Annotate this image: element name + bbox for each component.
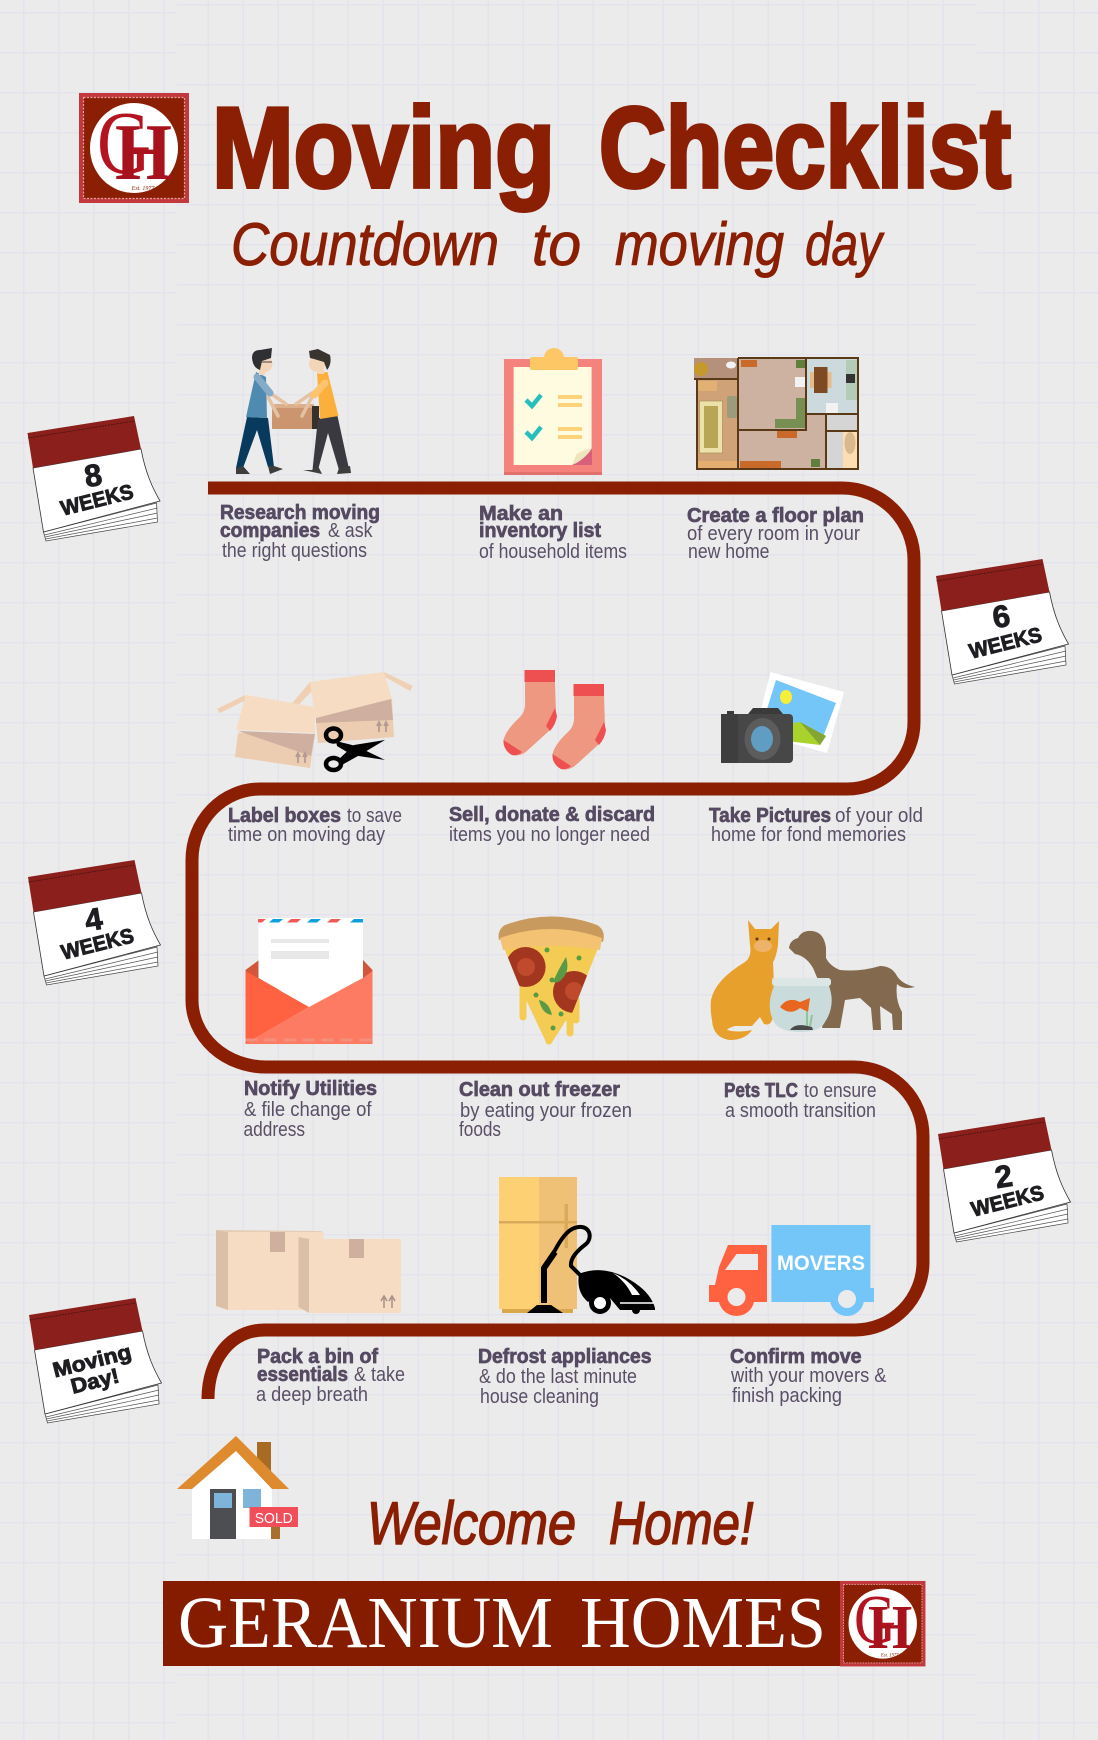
text: pack a bin of essentials: a deep breath	[256, 1384, 368, 1406]
calendar: 4 weeks: WEEKS	[59, 924, 136, 965]
text: take pictures: Take Pictures	[709, 805, 831, 827]
text: take pictures: of your old	[835, 805, 923, 827]
text: create a floor plan	[687, 505, 864, 563]
icon: two movers carrying a box	[236, 348, 351, 474]
logo: banner crest: G	[854, 1582, 896, 1659]
text: research moving companies: companies	[220, 520, 320, 542]
logo: Geranium Homes crest: Est. 1977	[131, 186, 155, 192]
text: pets TLC	[724, 1080, 876, 1122]
text: pack a bin of essentials: & take	[354, 1364, 405, 1386]
text: create a floor plan: of every room in your	[687, 523, 860, 545]
title	[212, 85, 1011, 212]
text: notify utilities	[244, 1078, 377, 1141]
text: label boxes: to save	[347, 805, 402, 827]
text: confirm move: Confirm move	[730, 1346, 862, 1368]
text: clean out freezer: Clean out freezer	[459, 1079, 620, 1101]
icon: clipboard checklist	[504, 348, 602, 475]
text: sell donate discard	[449, 804, 655, 846]
banner: Geranium Homes: GERANIUM	[178, 1582, 553, 1663]
text: make an inventory list: inventory list	[479, 520, 601, 542]
calendar: 2 weeks: WEEKS	[969, 1181, 1046, 1222]
calendar: 4 weeks	[28, 860, 160, 985]
subtitle: Countdown	[231, 211, 499, 278]
logo: Geranium Homes crest: H	[115, 109, 172, 197]
text: label boxes: Label boxes	[228, 805, 341, 827]
text: make an inventory list	[479, 503, 627, 563]
text: clean out freezer: foods	[459, 1119, 501, 1141]
text: pack a bin of essentials: Pack a bin of	[257, 1346, 378, 1368]
calendar: 4 weeks: 4	[82, 901, 106, 938]
timeline path	[192, 488, 923, 1399]
text: create a floor plan: Create a floor plan	[687, 505, 864, 527]
calendar: 6 weeks: 6	[990, 598, 1013, 635]
icon: refrigerator and vacuum cleaner	[499, 1177, 655, 1314]
text: pack a bin of essentials	[256, 1346, 405, 1406]
calendar: 8 weeks: WEEKS	[58, 480, 136, 521]
logo: banner crest: H	[868, 1594, 912, 1662]
logo: Geranium Homes crest: G	[97, 94, 151, 193]
text: sell donate discard: items you no longer need	[449, 824, 650, 846]
calendar: moving day: Day!	[69, 1364, 122, 1399]
heading: welcome home: Welcome	[367, 1490, 576, 1557]
text: create a floor plan: new home	[688, 541, 770, 563]
logo: Geranium Homes crest	[79, 93, 189, 203]
subtitle	[231, 211, 885, 278]
text: confirm move: with your movers &	[730, 1365, 887, 1387]
calendar: moving day: Moving	[51, 1341, 134, 1382]
text: research moving companies: Research moving	[220, 502, 380, 524]
text: take pictures	[709, 805, 923, 846]
text: pack a bin of essentials: essentials	[257, 1364, 348, 1386]
icon: movers truck	[709, 1225, 874, 1316]
calendar: 2 weeks	[938, 1117, 1070, 1242]
text: clean out freezer: by eating your frozen	[460, 1100, 632, 1122]
icon: movers truck: MOVERS	[777, 1252, 865, 1275]
text: defrost appliances: house cleaning	[480, 1386, 599, 1408]
icon: envelope with letter	[246, 918, 372, 1044]
text: make an inventory list: Make an	[479, 503, 563, 525]
text: research moving companies	[220, 502, 380, 562]
text: notify utilities: address	[244, 1119, 305, 1141]
text: defrost appliances	[478, 1346, 652, 1408]
icon: cardboard boxes and scissors	[217, 672, 413, 770]
icon: stacked cardboard boxes	[216, 1230, 401, 1313]
title: Moving	[212, 85, 555, 212]
text: pets TLC: to ensure	[804, 1080, 876, 1102]
text: defrost appliances: & do the last minute	[479, 1366, 637, 1388]
calendar: 8 weeks: 8	[82, 457, 104, 494]
text: notify utilities: & file change of	[244, 1099, 372, 1121]
icon: floor plan	[694, 358, 858, 469]
text: research moving companies: the right questions	[222, 540, 367, 562]
text: clean out freezer	[459, 1079, 632, 1141]
icon: pizza slice	[499, 916, 604, 1044]
text: take pictures: home for fond memories	[711, 824, 906, 846]
text: pets TLC: a smooth transition	[725, 1100, 876, 1122]
text: defrost appliances: Defrost appliances	[478, 1346, 652, 1368]
banner: Geranium Homes	[163, 1581, 840, 1666]
text: label boxes	[228, 805, 402, 846]
calendar: moving day	[29, 1298, 162, 1423]
title: Checklist	[599, 85, 1011, 212]
icon: cat, dog and goldfish	[711, 920, 915, 1040]
text: make an inventory list: of household items	[479, 541, 627, 563]
icon: camera and photograph	[721, 672, 844, 763]
heading: welcome home	[367, 1490, 754, 1557]
text: confirm move: finish packing	[732, 1385, 842, 1407]
icon: sold house	[177, 1436, 298, 1539]
text: sell donate discard: Sell, donate & discard	[449, 804, 655, 826]
banner: Geranium Homes: HOMES	[580, 1582, 826, 1663]
icon: sold house: SOLD	[255, 1510, 293, 1527]
text: pets TLC: Pets TLC	[724, 1080, 798, 1102]
text: notify utilities: Notify Utilities	[244, 1078, 377, 1100]
calendar: 2 weeks: 2	[992, 1158, 1015, 1195]
logo: banner crest: Est. 1977	[880, 1653, 899, 1658]
text: research moving companies: & ask	[328, 520, 373, 542]
subtitle: day	[805, 211, 885, 278]
calendar: 8 weeks	[28, 416, 160, 541]
icon: socks	[503, 670, 606, 769]
text: confirm move	[730, 1346, 887, 1407]
text: label boxes: time on moving day	[228, 824, 385, 846]
subtitle: moving	[615, 211, 784, 278]
heading: welcome home: Home!	[609, 1490, 754, 1557]
subtitle: to	[532, 211, 581, 278]
calendar: 6 weeks	[936, 559, 1068, 684]
calendar: 6 weeks: WEEKS	[967, 623, 1044, 664]
logo: banner crest	[840, 1581, 925, 1666]
